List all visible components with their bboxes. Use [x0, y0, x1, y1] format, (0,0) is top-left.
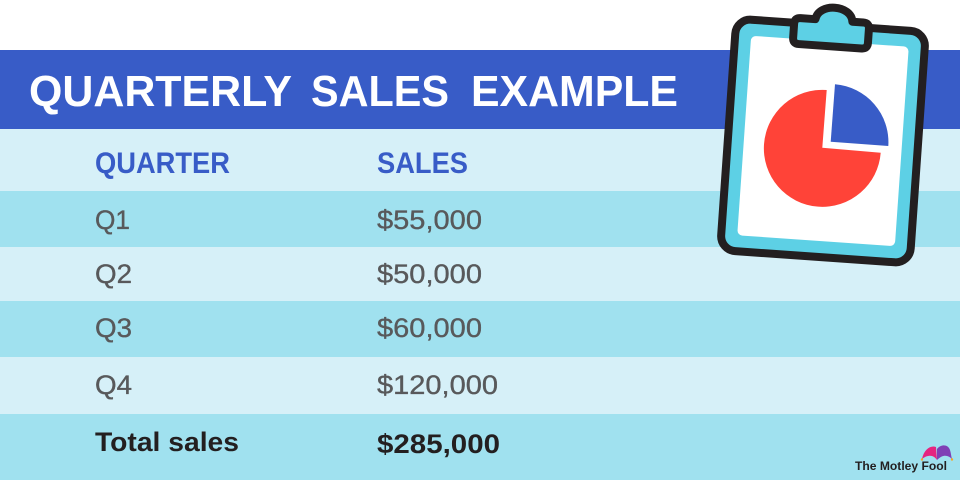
row: Q4: $120,000 — [377, 370, 498, 400]
icon: clipboard with pie chart — [720, 1, 927, 263]
icon: jester hat — [921, 445, 953, 461]
pie slice: blue — [831, 84, 888, 146]
row: Q1: $55,000 — [377, 205, 482, 235]
row: Q1: Q1 — [95, 205, 130, 235]
logo: The Motley Fool: The Motley Fool — [855, 459, 947, 473]
title — [29, 67, 678, 116]
table header: sales: SALES — [377, 147, 468, 180]
row: Q3: Q3 — [95, 313, 132, 343]
title: EXAMPLE — [471, 67, 678, 116]
row: Q3: $60,000 — [377, 313, 482, 343]
row: total sales — [95, 427, 500, 459]
title: QUARTERLY — [29, 67, 292, 116]
row: Q4 — [95, 370, 498, 400]
title banner — [0, 50, 960, 129]
row: Q4: Q4 — [95, 370, 132, 400]
title: SALES — [311, 67, 449, 116]
table header: quarter: QUARTER — [95, 147, 230, 180]
row: Q2: $50,000 — [377, 259, 482, 289]
row: total sales: Total sales — [95, 427, 239, 457]
logo: The Motley Fool — [855, 445, 953, 473]
row: total sales: $285,000 — [377, 429, 500, 459]
row: Q1 — [95, 205, 482, 235]
row: Q3 — [95, 313, 482, 343]
row: Q2 — [95, 259, 482, 289]
pie slice: red — [764, 90, 881, 207]
row: Q2: Q2 — [95, 259, 132, 289]
